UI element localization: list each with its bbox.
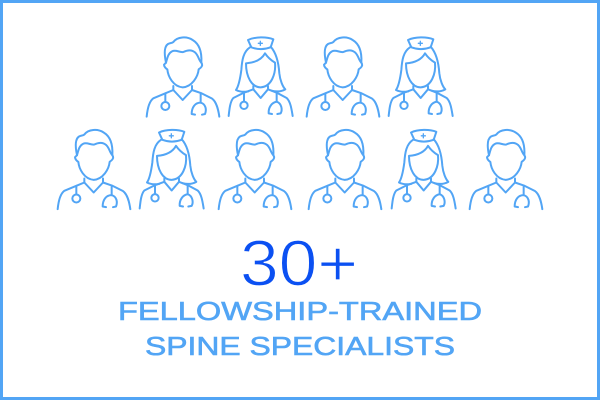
- big number: 30+: [240, 226, 358, 300]
- icon: doctor 2: [307, 37, 379, 117]
- caption line 2: SPINE SPECIALISTS: [145, 333, 455, 361]
- icon: nurse 3: [140, 130, 204, 208]
- top row of medical staff icons: [147, 37, 453, 117]
- icon: nurse 1: [229, 37, 293, 116]
- icon: doctor 5: [309, 130, 381, 209]
- bottom row of medical staff icons: [58, 130, 542, 209]
- icon: nurse 2: [389, 37, 453, 116]
- icon: doctor 3: [58, 130, 130, 209]
- icon: doctor 4: [219, 130, 291, 209]
- icon: doctor 6: [470, 130, 542, 209]
- icon: nurse 4: [392, 130, 456, 208]
- icon: doctor 1: [147, 37, 219, 117]
- caption line 1: FELLOWSHIP-TRAINED: [118, 298, 482, 326]
